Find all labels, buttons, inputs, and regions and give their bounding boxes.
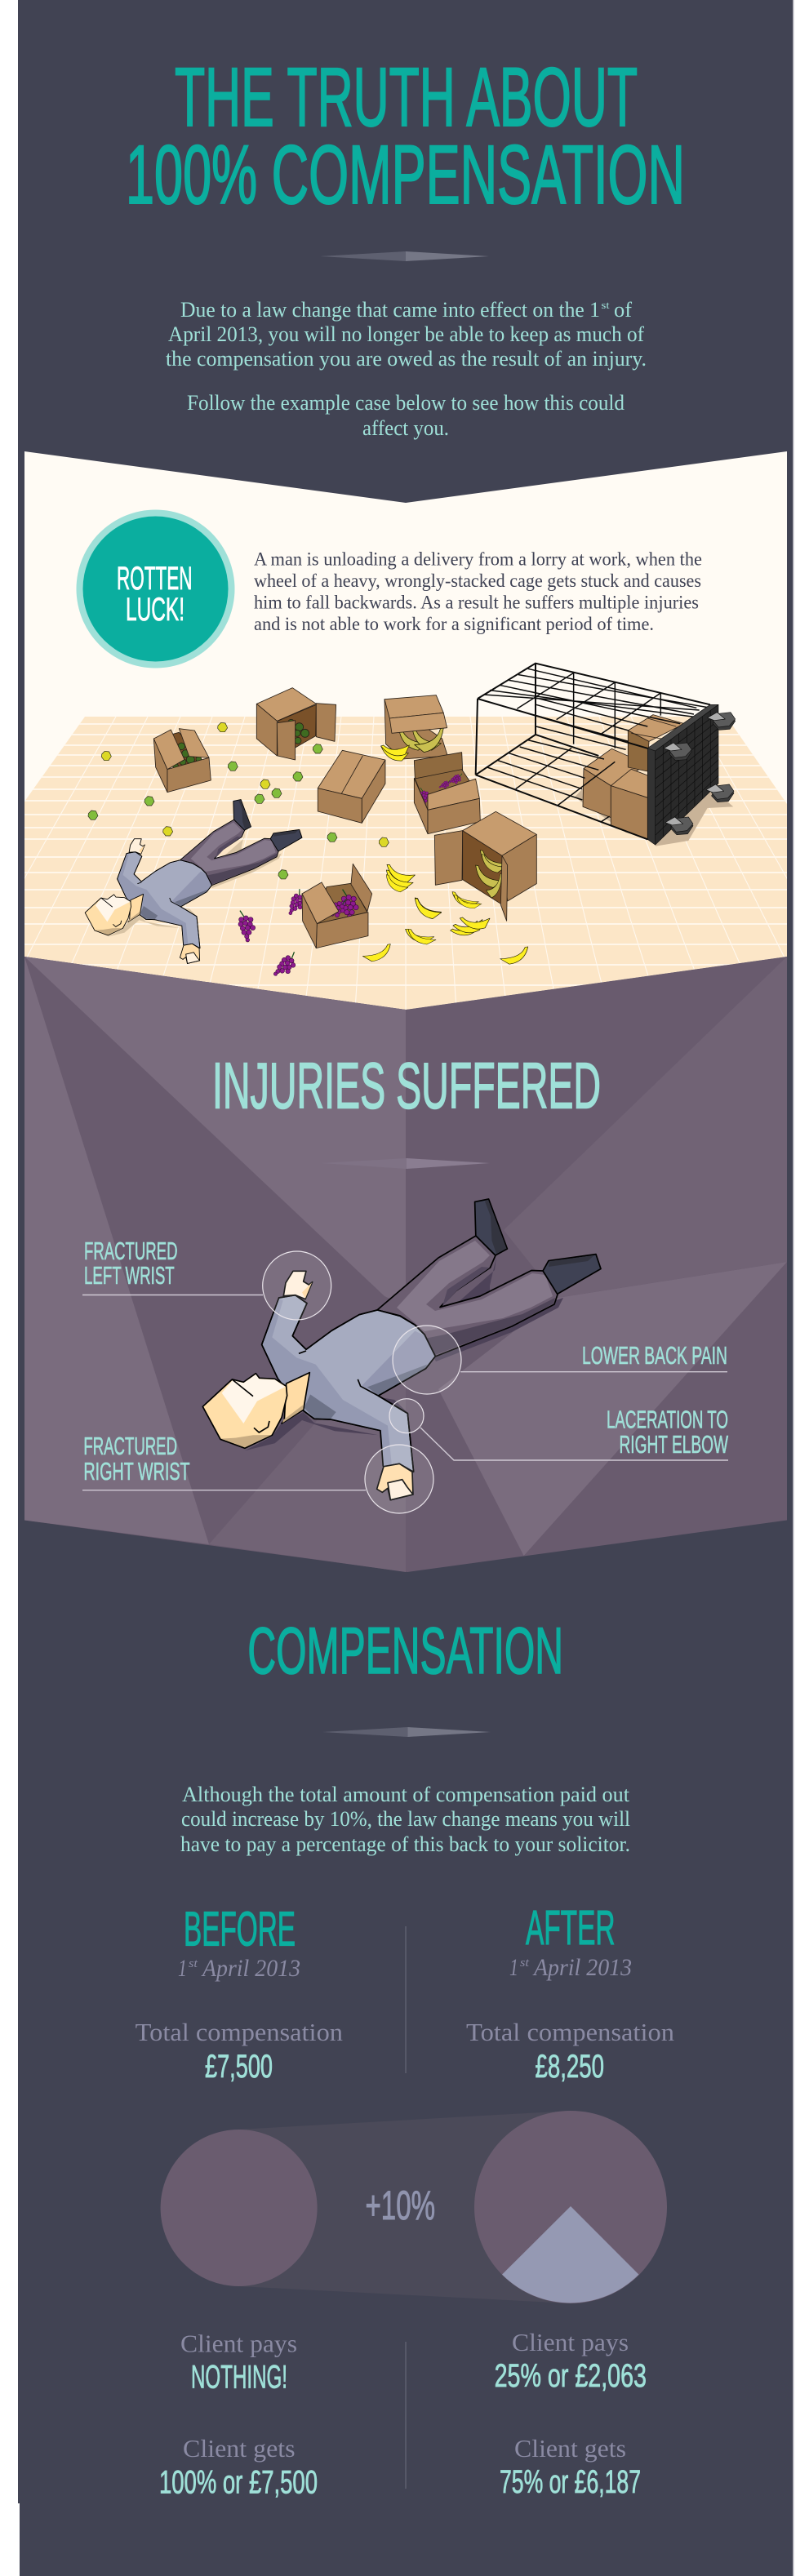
client pays after [495, 2328, 647, 2394]
intro text: affect you. [362, 416, 449, 440]
total compensation after: Total compensation [466, 2018, 675, 2046]
box of bananas [381, 695, 447, 765]
increase label: +10% [366, 2183, 435, 2228]
client gets after [500, 2434, 641, 2500]
open box with side door [256, 688, 336, 760]
badge: rotten luck: LUCK! [126, 592, 184, 628]
column: before header: April 2013 [201, 1955, 300, 1982]
intro text: st [601, 299, 610, 311]
divider: compensation [322, 1727, 491, 1737]
fruit, boxes and bananas left side [88, 688, 447, 981]
client gets after: 75% or £6,187 [500, 2464, 641, 2500]
callout: fractured right wrist: FRACTURED [83, 1432, 177, 1460]
column: before header [178, 1903, 300, 1982]
scenario text: wheel of a heavy, wrongly-stacked cage gets stuck and causes [254, 571, 701, 591]
panel background [24, 451, 787, 1010]
stacked boxes in cage [583, 715, 684, 839]
closed box [318, 750, 385, 823]
client pays before: NOTHING! [191, 2360, 287, 2396]
compensation text: Although the total amount of compensation paid out [182, 1783, 630, 1806]
heading: compensation: COMPENSATION [247, 1614, 563, 1688]
loose bananas [362, 861, 442, 962]
client pays before [180, 2330, 297, 2396]
big open box of bananas [434, 811, 536, 921]
faceted panel background [24, 957, 787, 1572]
scenario text: and is not able to work for a significant period of time. [254, 614, 654, 634]
cage, boxes and bananas right side [408, 664, 736, 964]
panel: rotten luck scene [0, 451, 809, 1010]
column: before header: 1 [178, 1955, 187, 1982]
open box of grapes [283, 864, 372, 948]
compensation text: have to pay a percentage of this back to your solicitor. [180, 1832, 630, 1856]
connector [238, 2111, 571, 2303]
column divider lower [405, 2342, 407, 2489]
client gets before [159, 2434, 318, 2500]
chart: pie comparison [161, 2111, 667, 2303]
loose bananas [408, 892, 528, 964]
scenario text: him to fall backwards. As a result he suffers multiple injuries [254, 593, 699, 613]
callout: laceration to right elbow: RIGHT ELBOW [619, 1431, 728, 1459]
column: before header: BEFORE [184, 1903, 296, 1956]
pie before [161, 2130, 318, 2286]
callout: laceration to right elbow: LACERATION TO [607, 1406, 728, 1434]
divider: title [320, 251, 489, 261]
column: after header: AFTER [526, 1901, 616, 1955]
box of grapes, upper [414, 753, 480, 834]
cage shadow [575, 789, 733, 846]
scenario text: A man is unloading a delivery from a lorry at work, when the [254, 549, 702, 570]
total compensation after [466, 2018, 675, 2085]
callout: fractured left wrist: LEFT WRIST [84, 1262, 175, 1290]
column: after header [509, 1901, 632, 1981]
client gets before: 100% or £7,500 [159, 2464, 318, 2500]
wire cage frame [476, 664, 710, 839]
divider: injuries [321, 1158, 490, 1169]
total compensation after: £8,250 [536, 2049, 604, 2085]
cage wheels [664, 713, 736, 835]
scattered apples [88, 722, 389, 879]
column: after header: 1 [509, 1954, 518, 1981]
column: after header: st [520, 1956, 530, 1970]
compensation text [180, 1783, 630, 1856]
panel: injuries suffered [24, 957, 787, 1572]
badge: rotten luck: ROTTEN [117, 561, 193, 597]
total compensation before [136, 2018, 344, 2085]
intro text: April 2013, you will no longer be able to keep as much of [168, 322, 644, 346]
client pays after: 25% or £2,063 [495, 2358, 647, 2394]
client pays after: Client pays [512, 2328, 629, 2356]
loose grapes [238, 911, 303, 981]
intro text [166, 298, 647, 440]
callout: lower back pain [393, 1326, 727, 1394]
callout: laceration to right elbow [389, 1399, 728, 1460]
badge: rotten luck [77, 509, 235, 668]
callout: fractured left wrist [82, 1237, 331, 1320]
fallen man [85, 800, 302, 963]
column: after header: April 2013 [532, 1954, 632, 1981]
cage end panel [647, 704, 718, 845]
total compensation before: Total compensation [136, 2018, 344, 2046]
scenario text [254, 549, 702, 634]
open box of apples [153, 729, 211, 793]
title [126, 51, 685, 221]
total compensation before: £7,500 [205, 2049, 273, 2085]
column divider upper [405, 1926, 407, 2073]
client gets before: Client gets [183, 2434, 296, 2463]
injured man [202, 1199, 601, 1500]
callout: fractured left wrist: FRACTURED [84, 1237, 178, 1265]
compensation text: could increase by 10%, the law change means you will [181, 1807, 630, 1831]
client pays before: Client pays [180, 2330, 297, 2358]
callout: fractured right wrist: RIGHT WRIST [83, 1458, 190, 1486]
callout: fractured right wrist [82, 1432, 433, 1513]
callout: lower back pain: LOWER BACK PAIN [582, 1342, 727, 1370]
intro text: Due to a law change that came into effect on the 1 [180, 298, 600, 322]
pie after [474, 2111, 667, 2303]
intro text: the compensation you are owed as the result of an injury. [166, 347, 647, 371]
warehouse floor with grid [0, 717, 809, 1010]
column: before header: st [189, 1957, 198, 1970]
intro text: of [614, 298, 632, 322]
client gets after: Client gets [514, 2434, 626, 2463]
intro text: Follow the example case below to see how this could [187, 391, 625, 415]
